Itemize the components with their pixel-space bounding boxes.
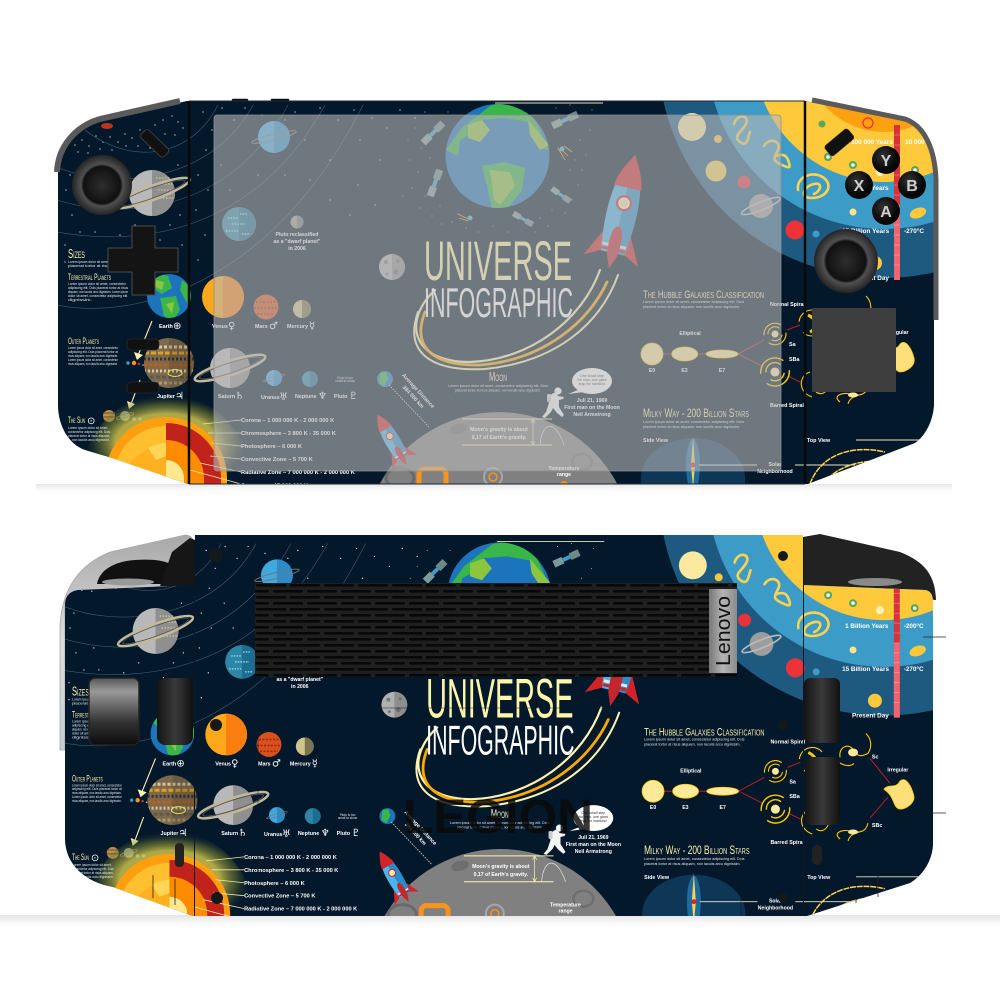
text labels: back skin: E0 bbox=[650, 805, 656, 811]
text labels: front skin: Mercury bbox=[287, 324, 308, 330]
text labels: back skin: aliquam, non iaculis arcu dignissim. Lorem ipsum bbox=[72, 728, 132, 732]
text labels: back skin: placerat tortor at risus aliquam, non iaculis arcu dignissim. bbox=[457, 826, 543, 830]
text labels: front skin: Chromosphere – 3 800 K - 35 000 K bbox=[241, 431, 337, 437]
text labels: back skin: Neighborhood bbox=[758, 906, 793, 912]
sun cross-section with leader lines bbox=[94, 835, 246, 916]
text labels: back skin: ☿ bbox=[312, 758, 318, 769]
text labels: front skin: Lorem ipsum dolor sit amet, consectetur adipiscing elit. Duis bbox=[448, 384, 548, 388]
sun cross-section with leader lines bbox=[88, 398, 242, 484]
text labels: front skin: UNIVERSE bbox=[424, 229, 572, 292]
text labels: back skin: SBa bbox=[789, 794, 801, 800]
text labels: front skin: Moon bbox=[489, 369, 507, 384]
text labels: front skin: Neptune bbox=[295, 394, 317, 400]
text labels: front skin: E3 bbox=[681, 368, 688, 374]
Lenovo tag bbox=[709, 589, 737, 673]
right kickstand tab upper bbox=[804, 678, 840, 743]
text labels: front skin: Lorem ipsum dolor sit amet, consectetur bbox=[68, 282, 127, 286]
text labels: back skin: SBc bbox=[872, 823, 882, 829]
text labels: front skin: ♃ bbox=[175, 391, 184, 402]
text labels: front skin: Earth bbox=[159, 324, 173, 330]
left small button bbox=[139, 128, 170, 158]
text labels: front skin: ♇ bbox=[349, 391, 358, 402]
text labels: back skin: Moon's gravity is about bbox=[472, 864, 530, 870]
text labels: front skin: Pluto is too bbox=[337, 376, 353, 380]
button B: B bbox=[906, 178, 918, 195]
text labels: back skin: Milky Way - 200 Billion Stars bbox=[644, 843, 750, 857]
button X: X bbox=[854, 178, 865, 195]
ground shadow: upper device bbox=[36, 484, 952, 494]
text labels: front skin: Neighborhood bbox=[757, 469, 793, 475]
left stacked buttons bbox=[127, 339, 159, 393]
text labels: back skin: placerat tortor at risus aliquam bbox=[72, 702, 132, 706]
right kickstand tab lower bbox=[805, 757, 840, 825]
text labels: front skin: Top View bbox=[807, 438, 831, 444]
text labels: front skin: Milky Way - 200 Billion Stars bbox=[643, 406, 749, 420]
artwork: back skin bbox=[65, 535, 933, 916]
planet orbits bbox=[57, 105, 363, 308]
text labels: front skin: dignissim. bbox=[68, 298, 92, 302]
text labels: back skin: placerat tortor at risus aliquam, non iaculis arcu dignissim. bbox=[644, 742, 741, 746]
text labels: back skin: Lorem ipsum dolor sit amet, bbox=[72, 863, 112, 867]
text labels: back skin: ♇ bbox=[352, 828, 360, 839]
large rocket bbox=[584, 677, 640, 706]
text labels: front skin: Lorem ipsum dolor sit amet, consectetur bbox=[68, 358, 119, 362]
text labels: front skin: Corona – 1 000 000 K - 2 000 000 K bbox=[241, 418, 335, 424]
text labels: front skin: Outer Planets bbox=[68, 336, 99, 346]
text labels: back skin: 1 Billion Years bbox=[845, 623, 889, 630]
text labels: back skin: Side View bbox=[644, 875, 670, 881]
planets in centre section bbox=[193, 121, 430, 428]
text labels: back skin: UNIVERSE bbox=[426, 668, 573, 730]
text labels: back skin: Barred Spiral bbox=[770, 840, 805, 846]
text labels: front skin: Elliptical bbox=[679, 331, 701, 337]
planet orbits bbox=[61, 543, 365, 746]
text labels: front skin: Moon's gravity is about bbox=[470, 427, 528, 433]
text labels: front skin: small to show bbox=[335, 379, 355, 383]
text labels: front skin: Sc bbox=[872, 317, 879, 323]
text labels: front skin: ♄ bbox=[235, 391, 244, 402]
text labels: front skin: dolor sit amet, consectetur adipiscing elit. bbox=[68, 294, 128, 298]
text labels: back skin: Sizes bbox=[72, 684, 89, 699]
text labels: back skin: Lorem ipsum dolor sit amet, consectetur bbox=[72, 720, 130, 724]
fabric strap bbox=[255, 583, 737, 677]
text labels: front skin: placerat tortor at risus aliquam, non iaculis arcu dignissim. bbox=[643, 425, 740, 429]
text labels: back skin: Temperature bbox=[550, 903, 581, 909]
text labels: front skin: placerat tortor at risus aliquam, non iaculis arcu dignissim. bbox=[643, 305, 740, 309]
glass screen bbox=[214, 115, 781, 471]
text labels: front skin: Saturn bbox=[218, 394, 235, 400]
right grip shell with trigger bbox=[803, 534, 936, 600]
text labels: back skin: 0,17 of Earth's gravity. bbox=[474, 872, 529, 878]
text labels: back skin: adipiscing elit. Duis placerat tortor at bbox=[72, 787, 122, 791]
text labels: back skin: non iaculis arcu dignissim. bbox=[76, 875, 114, 879]
text labels: back skin: Sc bbox=[872, 754, 879, 760]
text labels: back skin: Saturn bbox=[221, 831, 238, 837]
text labels: back skin: risus aliquam, non iaculis arcu dignissim. bbox=[72, 791, 122, 795]
background with universe timeline bands bbox=[65, 535, 933, 916]
text labels: back skin: E7 bbox=[720, 805, 726, 811]
device back view: skinned handheld bbox=[60, 534, 946, 916]
text labels: front skin: Convective Zone – 5 700 K bbox=[241, 457, 314, 463]
text labels: front skin: Present Day bbox=[852, 275, 889, 282]
text labels: front skin: leap for mankind bbox=[579, 382, 605, 386]
text labels: front skin: Pluto reclassified bbox=[276, 232, 318, 238]
text labels: front skin: Lorem ipsum dolor sit amet, consectetur adipiscing elit. Duis bbox=[643, 300, 744, 304]
text labels: front skin: Juli 21, 1969 bbox=[577, 398, 607, 404]
astronaut and speech bubble bbox=[544, 805, 613, 855]
text labels: back skin: Photosphere – 6 000 K bbox=[244, 881, 306, 887]
top buttons bbox=[233, 99, 288, 101]
text labels: back skin: Irregular bbox=[887, 767, 908, 773]
text labels: front skin: placerat tortor at risus aliquam, non iaculis arcu dignissim. bbox=[455, 388, 541, 392]
text labels: back skin bbox=[72, 622, 924, 915]
ground shadow: lower device bbox=[0, 915, 1000, 931]
text labels: back skin: placerat tortor at risus aliquam, bbox=[72, 871, 114, 875]
text labels: front skin: Lorem ipsum dolor sit amet, consectetur bbox=[68, 346, 119, 350]
text labels: back skin: for man, one giant bbox=[579, 815, 608, 819]
text labels: front skin: Pluto bbox=[334, 394, 348, 400]
text labels: back skin: Lorem ipsum dolor sit amet, consectetur adipiscing elit. Duis bbox=[450, 821, 550, 825]
text labels: front skin: Average Distance bbox=[400, 373, 435, 410]
text labels: back skin: Venus bbox=[215, 761, 231, 767]
button X bbox=[845, 171, 873, 199]
text labels: back skin: Outer Planets bbox=[72, 773, 103, 783]
text labels: front skin: Uranus bbox=[261, 395, 280, 401]
text labels: front skin: 15 Billion Years bbox=[842, 228, 890, 235]
text labels: front skin: ♅ bbox=[279, 392, 288, 403]
text labels: front skin: aliquam, non iaculis arcu dignissim. Lorem ipsum bbox=[68, 290, 128, 294]
text labels: front skin: consectetur adipiscing elit. Duis bbox=[68, 430, 110, 434]
left trigger bbox=[97, 538, 195, 586]
text labels: front skin: placerat tortor at risus aliquam, bbox=[68, 434, 110, 438]
text labels: back skin: INFOGRAPHIC bbox=[426, 716, 574, 763]
text labels: front skin: non iaculis arcu dignissim. bbox=[72, 438, 110, 442]
text labels: front skin: Irregular bbox=[887, 330, 909, 336]
right shell top bezel and side button bbox=[812, 100, 936, 320]
text labels: back skin: ♆ bbox=[321, 828, 330, 839]
text labels: front skin: ♀ bbox=[228, 321, 235, 332]
text labels: back skin: ⊕ bbox=[176, 758, 185, 769]
large rocket bbox=[584, 156, 642, 268]
button A: A bbox=[880, 204, 892, 221]
milky way diagram bbox=[642, 873, 918, 916]
artwork: front skin bbox=[58, 101, 934, 484]
left shell top bezel bbox=[57, 101, 180, 172]
text labels: back skin: First man on the Moon bbox=[566, 842, 621, 848]
text labels: back skin: Radiative Zone – 7 000 000 K - 2 000 000 K bbox=[244, 907, 358, 913]
star field bbox=[68, 543, 594, 700]
text labels: back skin: small to show bbox=[338, 816, 358, 820]
text labels: front skin: Mars bbox=[255, 324, 268, 330]
title swoosh bbox=[416, 708, 619, 806]
text labels: front skin: Sizes bbox=[68, 246, 85, 261]
text labels: back skin: 384 000 km bbox=[403, 822, 427, 847]
text labels: front skin: 0,17 of Earth's gravity. bbox=[472, 435, 527, 441]
galaxy classification diagram bbox=[641, 296, 914, 404]
text labels: front skin: 10 000°C bbox=[905, 138, 932, 146]
left kickstand tab 2 bbox=[157, 678, 193, 745]
text labels: front skin: Lorem ipsum dolor sit amet, consectetur adipiscing elit. Duis bbox=[643, 420, 744, 424]
text labels: front skin: in 2006 bbox=[288, 246, 306, 252]
text labels: back skin: Pluto reclassified bbox=[278, 670, 321, 676]
text labels: back skin: The Hubble Galaxies Classification bbox=[644, 727, 765, 739]
text labels: back skin: Juli 21, 1969 bbox=[578, 835, 609, 841]
moon surface bbox=[384, 849, 616, 916]
background with universe timeline bands bbox=[58, 101, 934, 484]
text labels: front skin: Barred Spiral bbox=[770, 403, 804, 409]
text labels: back skin: Present Day bbox=[852, 713, 889, 720]
Lenovo tag: Lenovo bbox=[713, 596, 735, 666]
text labels: front skin: Terrestrial Planets bbox=[68, 272, 111, 282]
planets on left grip bbox=[103, 170, 195, 422]
text labels: back skin: Neptune bbox=[298, 831, 319, 837]
left joystick bbox=[72, 155, 132, 215]
text labels: back skin: Jupiter bbox=[161, 831, 178, 837]
text labels: back skin: -270°C bbox=[904, 665, 924, 673]
text labels: front skin: Radiative Zone – 7 000 000 K - 2 000 000 K bbox=[241, 470, 356, 476]
text labels: front skin: Venus bbox=[212, 324, 228, 330]
text labels: front skin: The Sun bbox=[68, 415, 85, 425]
text labels: back skin: range bbox=[558, 909, 573, 915]
text labels: front skin: SBa bbox=[789, 357, 800, 363]
text labels: back skin: leap for mankind bbox=[580, 819, 607, 823]
text labels: front skin: ♆ bbox=[318, 391, 327, 402]
text labels: front skin: Side View bbox=[643, 438, 669, 444]
text labels: front skin: Solar bbox=[769, 462, 781, 468]
text labels: back skin: ♀ bbox=[231, 758, 238, 769]
text labels: back skin: Lorem ipsum dolor sit amet, consectetur bbox=[72, 795, 122, 799]
text labels: front skin: 384 000 km bbox=[401, 385, 425, 410]
planets in centre section bbox=[196, 559, 432, 865]
text labels: front skin: ♂ bbox=[269, 321, 278, 332]
right joystick bbox=[814, 229, 878, 293]
speaker and port holes bbox=[175, 548, 822, 904]
text labels: front skin: 100 000 Years bbox=[851, 139, 893, 146]
faint body panel outline bbox=[258, 708, 741, 916]
text labels: back skin: Pluto bbox=[337, 831, 351, 837]
embossed brand word: LEGION bbox=[403, 791, 593, 844]
text labels: back skin: dolor sit amet, consectetur adipiscing elit. bbox=[72, 732, 132, 736]
text labels: front skin: E7 bbox=[719, 368, 725, 374]
text labels: back skin: risus aliquam, non iaculis arcu dignissim. bbox=[72, 799, 122, 803]
text labels: front skin bbox=[68, 138, 932, 489]
text labels: back skin: ⊙ bbox=[91, 853, 99, 864]
text labels: back skin: Elliptical bbox=[680, 768, 702, 774]
text labels: front skin: for man, one giant bbox=[578, 378, 606, 382]
text labels: back skin: Moon bbox=[491, 806, 509, 821]
text labels: back skin: adipiscing elit. Duis placerat tortor at risus bbox=[72, 724, 132, 728]
text labels: back skin: placerat tortor at risus aliquam, non iaculis arcu dignissim. bbox=[644, 862, 741, 866]
text labels: back skin: Normal Spiral bbox=[770, 739, 806, 745]
text labels: front skin: Core – over 15 000 000 K bbox=[241, 483, 309, 489]
text labels: front skin: as a "dwarf planet" bbox=[273, 239, 321, 245]
text labels: front skin: Lorem ipsum dolor sit amet, consectetur bbox=[68, 260, 129, 264]
text labels: back skin: ♂ bbox=[272, 758, 281, 769]
text labels: front skin: Sa bbox=[789, 342, 797, 348]
text labels: front skin: risus aliquam, non iaculis arcu dignissim. bbox=[68, 362, 118, 366]
text labels: back skin: in 2006 bbox=[291, 684, 309, 690]
title swoosh bbox=[414, 270, 618, 369]
astronaut and speech bubble bbox=[542, 368, 612, 418]
star field bbox=[64, 104, 592, 263]
small rocket bbox=[377, 415, 416, 468]
text labels: back skin: Neil Armstrong bbox=[575, 849, 612, 855]
text labels: front skin: 1 Billion Years bbox=[845, 185, 889, 192]
section seams bbox=[194, 537, 804, 916]
small rocket bbox=[380, 852, 419, 906]
top edge of body bbox=[189, 101, 805, 484]
left kickstand tab bbox=[89, 678, 139, 745]
text labels: back skin: Chromosphere – 3 800 K - 35 000 K bbox=[244, 868, 339, 874]
text labels: front skin: Normal Spiral bbox=[770, 302, 806, 308]
text labels: back skin: One small step bbox=[581, 811, 605, 815]
left grip shell bbox=[60, 535, 195, 750]
text labels: front skin: Temperature bbox=[548, 466, 580, 472]
callout tick lines bbox=[153, 637, 946, 905]
text labels: back skin: E3 bbox=[682, 805, 689, 811]
text labels: back skin: Solar bbox=[769, 899, 782, 905]
text labels: back skin: Lorem ipsum dolor sit amet, consectetur adipiscing elit. Duis bbox=[644, 737, 745, 741]
text labels: back skin: Mercury bbox=[290, 761, 311, 767]
text labels: front skin: placerat tortor at risus aliquam bbox=[68, 264, 128, 268]
right small button bbox=[824, 128, 855, 157]
text labels: back skin: dignissim. bbox=[72, 735, 96, 739]
button A bbox=[872, 197, 900, 225]
text labels: back skin: Convective Zone – 5 700 K bbox=[244, 894, 316, 900]
text labels: front skin: ☿ bbox=[309, 321, 315, 332]
button Y: Y bbox=[881, 153, 892, 170]
text labels: front skin: INFOGRAPHIC bbox=[424, 279, 573, 326]
text labels: front skin: First man on the Moon bbox=[564, 405, 620, 411]
earth and satellites bbox=[422, 541, 604, 583]
text labels: back skin: Corona – 1 000 000 K - 2 000 000 K bbox=[244, 855, 338, 861]
milky way diagram bbox=[641, 436, 919, 484]
earth and satellites bbox=[421, 100, 603, 227]
text labels: front skin: adipiscing elit. Duis placerat tortor at bbox=[68, 350, 118, 354]
text labels: front skin: ⊙ bbox=[87, 416, 95, 427]
text labels: back skin: Mars bbox=[258, 761, 271, 767]
d-pad bbox=[108, 226, 178, 295]
device front view: skinned handheld bbox=[54, 98, 938, 484]
text labels: back skin: consectetur adipiscing elit. Duis bbox=[72, 867, 114, 871]
text labels: front skin: range bbox=[557, 472, 571, 478]
text labels: back skin: ♅ bbox=[282, 829, 291, 840]
text labels: front skin: risus aliquam, non iaculis arcu dignissim. bbox=[68, 354, 118, 358]
text labels: front skin: Neil Armstrong bbox=[573, 412, 611, 418]
text labels: front skin: adipiscing elit. Duis placerat tortor at risus bbox=[68, 286, 128, 290]
text labels: front skin: Jupiter bbox=[157, 394, 176, 400]
text labels: back skin: Earth bbox=[163, 761, 176, 767]
trackpad bbox=[812, 308, 896, 392]
text labels: back skin: Lorem ipsum dolor sit amet, consectetur bbox=[72, 783, 122, 787]
text labels: back skin: Pluto is too bbox=[340, 813, 356, 817]
text labels: front skin: One small step bbox=[580, 374, 604, 378]
text labels: back skin: 15 Billion Years bbox=[842, 666, 889, 673]
planets on left grip bbox=[107, 608, 198, 859]
text labels: back skin: Lorem ipsum dolor sit amet, consectetur adipiscing elit. Duis bbox=[644, 857, 745, 861]
text labels: back skin: Uranus bbox=[264, 832, 282, 838]
text labels: back skin: ♄ bbox=[238, 828, 247, 839]
text labels: back skin: Sa bbox=[789, 779, 797, 785]
text labels: front skin: Lorem ipsum dolor sit amet, bbox=[68, 426, 108, 430]
text labels: front skin: -200°C bbox=[904, 184, 924, 192]
text labels: back skin: Average Distance bbox=[402, 810, 437, 847]
text labels: front skin: Photosphere – 6 000 K bbox=[241, 444, 303, 450]
button Y bbox=[872, 146, 900, 174]
text labels: back skin: ♃ bbox=[178, 828, 187, 839]
text labels: front skin: SBc bbox=[872, 386, 882, 392]
text labels: front skin: ⊕ bbox=[173, 321, 181, 332]
moon surface bbox=[380, 412, 617, 484]
text labels: back skin: The Sun bbox=[72, 852, 89, 862]
centre section dividers bbox=[189, 101, 805, 484]
text labels: front skin: E0 bbox=[649, 368, 655, 374]
text labels: back skin: as a "dwarf planet" bbox=[276, 677, 324, 683]
text labels: back skin: Terrestrial Planets bbox=[72, 710, 115, 720]
galaxy classification diagram bbox=[642, 734, 914, 841]
button B bbox=[898, 171, 926, 199]
text labels: back skin: -200°C bbox=[904, 622, 924, 630]
text labels: front skin: -270°C bbox=[904, 227, 924, 235]
text labels: front skin: The Hubble Galaxies Classification bbox=[643, 289, 764, 301]
text labels: back skin: Lorem ipsum dolor sit amet, consectetur bbox=[72, 698, 132, 702]
text labels: back skin: Top View bbox=[807, 875, 831, 881]
